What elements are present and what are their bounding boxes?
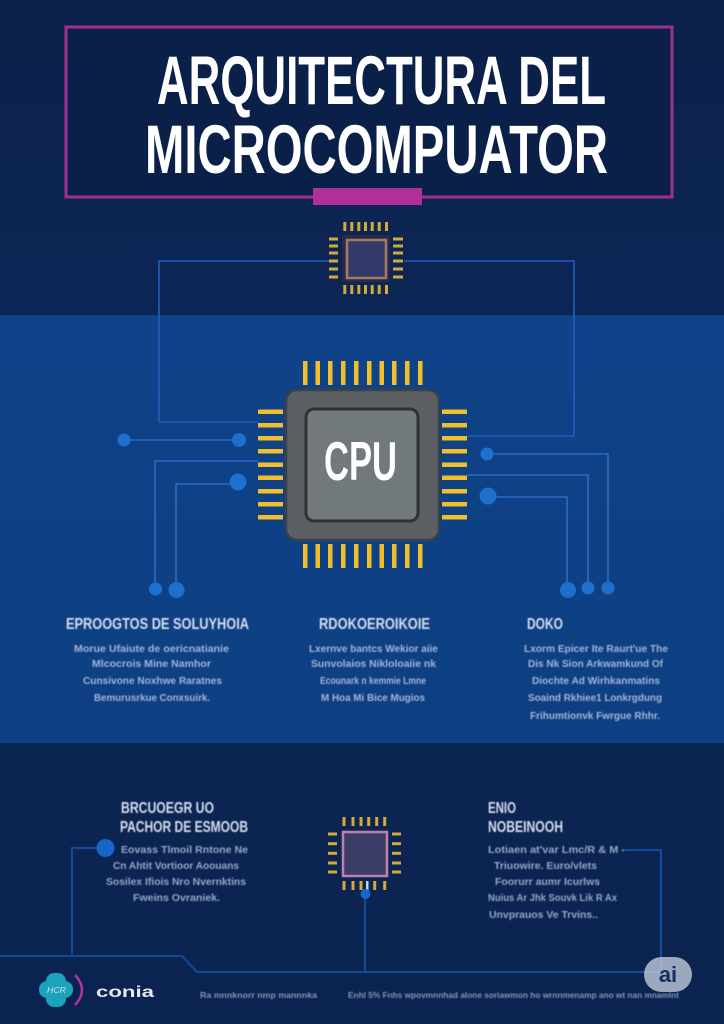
footer text: Ra mnnknorr nmp mannnka xyxy=(200,990,317,1000)
text block: bottom left: Sosilex Ifiois Nro Nvernktins xyxy=(106,876,246,888)
text block: column 1 xyxy=(66,616,249,704)
text block: column 2: Lxernve bantcs Wekior aiie xyxy=(309,643,438,655)
text block: column 3: Frihumtionvk Fwrgue Rhhr. xyxy=(530,710,660,722)
text block: column 2: Sunvolaios Nikloloaiie nk xyxy=(311,658,436,670)
text block: bottom right: ENIO xyxy=(488,800,516,817)
text block: column 2: RDOKOEROIKOIE xyxy=(319,616,430,633)
magenta accent bar xyxy=(313,188,422,205)
bottom circuit traces xyxy=(0,848,661,972)
text block: bottom right: Unvprauos Ve Trvins.. xyxy=(489,909,598,921)
icon: small bottom chip xyxy=(328,817,401,899)
text block: bottom right: Triuowire. Euro/vlets xyxy=(494,860,597,872)
text block: bottom right: Nuius Ar Jhk Souvk Lik R Ax xyxy=(488,892,617,904)
ai badge xyxy=(644,957,692,992)
text block: column 1: Cunsivone Noxhwe Raratnes xyxy=(83,675,222,687)
footer brand name: conia xyxy=(96,984,154,1001)
text block: bottom left xyxy=(106,800,248,904)
central blue band xyxy=(0,315,724,743)
text block: bottom left: Fweins Ovraniek. xyxy=(133,892,220,904)
title panel xyxy=(66,27,672,197)
text block: column 3: Soaind Rkhiee1 Lonkrgdung xyxy=(528,692,662,704)
text block: column 1: EPROOGTOS DE SOLUYHOIA xyxy=(66,616,249,633)
title heading xyxy=(145,42,608,188)
node: bottom left xyxy=(96,839,114,857)
top background xyxy=(0,0,724,315)
text block: column 3: DOKO xyxy=(527,616,563,633)
connector lines: top chip to CPU xyxy=(159,261,574,436)
icon: footer logo: HCR xyxy=(47,986,66,995)
text block: column 2: M Hoa Mi Bice Mugios xyxy=(321,692,425,704)
left circuit traces and nodes xyxy=(118,433,258,598)
text block: column 2: Ecounark n kemmie Lmne xyxy=(320,675,426,687)
bottom background xyxy=(0,743,724,1024)
icon: footer logo xyxy=(39,973,82,1007)
icon: CPU chip xyxy=(258,361,467,568)
text block: column 3: Dis Nk Sion Arkwamkund Of xyxy=(528,658,663,670)
text block: column 3 xyxy=(524,616,668,722)
right circuit traces and nodes xyxy=(467,448,614,598)
text block: bottom left: BRCUOEGR UO xyxy=(121,800,214,817)
text block: column 3: Lxorm Epicer Ite Raurt'ue The xyxy=(524,643,668,655)
footer text: Enhl 5% Fnhs wpovmnnhad alone soriawmon ho wrnnmenamp ano wt nan mnamlnt xyxy=(348,990,679,1000)
text block: bottom left: PACHOR DE ESMOOB xyxy=(120,819,248,836)
text block: bottom right: NOBEINOOH xyxy=(488,819,563,836)
text block: column 3: Diochte Ad Wirhkanmatins xyxy=(532,675,660,687)
text block: bottom left: Cn Ahtit Vortioor Aoouans xyxy=(113,860,239,872)
icon: small top chip xyxy=(329,222,403,294)
footer text xyxy=(200,990,679,1000)
text block: column 1: Mlcocrois Mine Namhor xyxy=(92,658,211,670)
text block: column 1: Morue Ufaiute de oericnatianie xyxy=(74,643,229,655)
text block: bottom right: Lotiaen at'var Lmc/R & M - xyxy=(488,844,626,856)
text block: bottom right: Foorurr aumr Icurlws xyxy=(495,876,600,888)
ai badge: ai xyxy=(659,962,677,987)
text block: column 2 xyxy=(309,616,438,704)
text block: bottom right xyxy=(488,800,626,921)
text block: column 1: Bemurusrkue Conxsuirk. xyxy=(94,692,210,704)
text block: bottom left: Eovass Tlmoil Rntone Ne xyxy=(121,844,248,856)
CPU label: CPU xyxy=(324,430,397,492)
